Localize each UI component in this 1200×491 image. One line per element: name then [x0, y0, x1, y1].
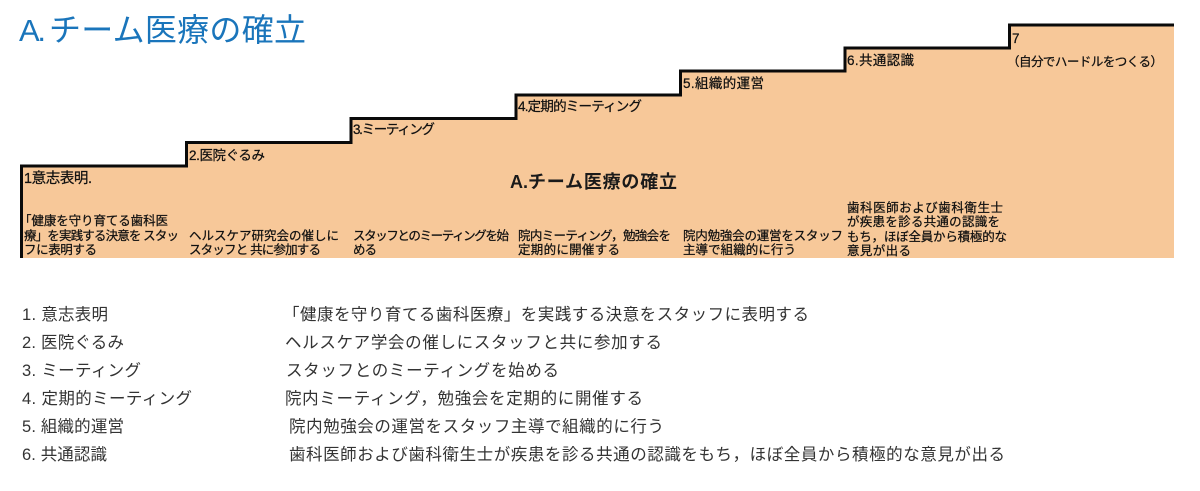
step 2: [189, 148, 339, 257]
list: step names: 1. 意志表明: [22, 305, 108, 324]
list: step names: 4. 定期的ミーティング: [22, 389, 192, 408]
staircase fill: [22, 25, 1174, 258]
list: step names: 3. ミーティング: [22, 361, 141, 380]
step 5: 主導で組織的に行う: [683, 242, 796, 257]
step 6: 歯科医師および歯科衛生士: [847, 201, 1003, 215]
list: step names: 2. 医院ぐるみ: [22, 333, 124, 352]
step 1: 「健康を守り育てる歯科医: [19, 213, 168, 228]
step 2: スタッフと 共に参加する: [189, 243, 321, 257]
step 3: 3.ミーティング: [353, 122, 435, 137]
step 4: [518, 99, 671, 257]
step 6: 意見が出る: [847, 243, 911, 258]
step 2: 2.医院ぐるみ: [189, 148, 265, 163]
step 4: 定期的に開催する: [518, 242, 620, 257]
title: チーム医療の確立: [49, 12, 306, 48]
list: step descriptions: ヘルスケア学会の催しにスタッフと共に参加する: [285, 333, 662, 352]
staircase outline: [22, 25, 1174, 258]
step 4: 院内ミーティング，勉強会を: [518, 229, 671, 243]
step 7: 7: [1012, 31, 1020, 46]
step 3: [353, 122, 509, 257]
list: step names: 6. 共通認識: [22, 445, 108, 464]
step 3: スタッフとのミーティングを始: [353, 229, 509, 243]
step 6: が疾患を診る共通の認識を: [847, 214, 1000, 229]
list: step descriptions: [283, 305, 1005, 464]
center heading: A.: [510, 172, 528, 192]
list: step names: 5. 組織的運営: [22, 417, 124, 436]
title: A.: [19, 13, 46, 48]
list: step descriptions: 院内ミーティング，勉強会を定期的に開催する: [285, 389, 643, 408]
step 5: 5.組織的運営: [683, 76, 764, 91]
step 1: フに表明する: [24, 243, 97, 257]
step 5: [683, 76, 843, 257]
step 6: [847, 53, 1007, 258]
step 4: 4.定期的ミーティング: [518, 99, 642, 114]
step 1: [19, 170, 179, 257]
step 5: 院内勉強会の運営をスタッフ: [683, 229, 843, 243]
list: step descriptions: 院内勉強会の運営をスタッフ主導で組織的に行う: [289, 417, 664, 436]
step 7: （自分でハードルをつくる）: [1007, 55, 1163, 69]
list: step descriptions: 歯科医師および歯科衛生士が疾患を診る共通の認識をもち，ほぼ全員から積極的な意見が出る: [289, 445, 1005, 464]
list: step names: [22, 305, 192, 464]
step 1: 療」を実践する決意を スタッ: [24, 228, 179, 243]
center heading: チーム医療の確立: [528, 172, 677, 192]
staircase diagram: [19, 25, 1174, 258]
list: step descriptions: 「健康を守り育てる歯科医療」を実践する決意をスタッフに表明する: [283, 305, 809, 324]
step 7: [1007, 31, 1163, 69]
step 3: める: [353, 243, 377, 257]
step 6: もち，ほぼ全員から積極的な: [847, 229, 1007, 244]
step 6: 6.共通認識: [847, 53, 914, 68]
step 1: 1意志表明.: [24, 170, 92, 187]
list: step descriptions: スタッフとのミーティングを始める: [286, 361, 559, 380]
step 2: ヘルスケア研究会の催しに: [189, 229, 339, 243]
